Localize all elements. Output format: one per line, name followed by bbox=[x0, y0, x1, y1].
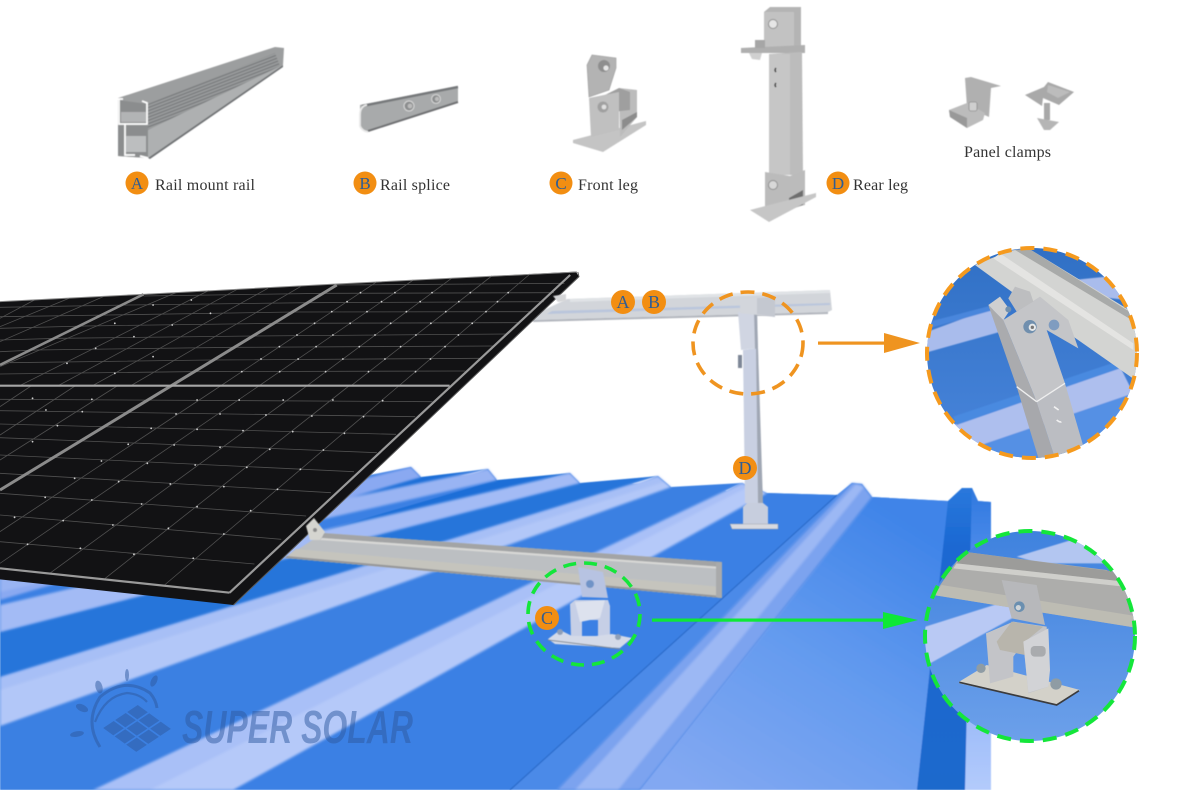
marker C: C bbox=[541, 608, 553, 628]
solar panel array bbox=[0, 272, 579, 605]
icon: sun rays bbox=[70, 669, 159, 738]
watermark logo: Super Solar bbox=[70, 669, 413, 753]
marker A: A bbox=[616, 292, 630, 312]
panel: component legend bbox=[118, 7, 1074, 222]
callout: A Rail mount rail: Rail mount rail bbox=[155, 177, 256, 194]
callout: B Rail splice: Rail splice bbox=[380, 177, 450, 194]
detail lens: front leg bbox=[920, 531, 1140, 741]
callout: B Rail splice bbox=[354, 172, 450, 194]
component: rear leg bbox=[741, 7, 816, 222]
detail lens: rear leg bbox=[920, 240, 1145, 465]
marker C bbox=[535, 606, 559, 630]
panel seams and frame bbox=[0, 272, 579, 605]
icon: sun arcs bbox=[92, 685, 157, 747]
callout: C Front leg bbox=[550, 172, 638, 194]
callout: D Rear leg bbox=[826, 172, 908, 194]
component: rail mount rail bbox=[118, 47, 284, 159]
roof bbox=[0, 467, 991, 790]
cell grid bbox=[0, 274, 564, 585]
highlight ring: front leg bbox=[528, 563, 640, 665]
rail clamp: upper bbox=[553, 294, 566, 302]
icon: solar grid bbox=[103, 705, 171, 752]
component: rail splice bbox=[360, 86, 458, 132]
arrow: green bbox=[652, 612, 918, 629]
callout: C Front leg: Front leg bbox=[578, 177, 638, 194]
marker B: B bbox=[648, 292, 660, 312]
marker D: D bbox=[738, 458, 752, 478]
marker A bbox=[611, 290, 635, 314]
callout: D Rear leg: D bbox=[832, 174, 844, 193]
rear leg foot bbox=[730, 503, 778, 529]
callout: D Rear leg: Rear leg bbox=[853, 177, 908, 194]
callout: B Rail splice: B bbox=[359, 174, 371, 193]
component: front leg bbox=[573, 55, 646, 152]
rear leg bbox=[730, 297, 778, 529]
callout: C Front leg: C bbox=[555, 174, 567, 193]
ribs bbox=[0, 467, 872, 790]
arrow: orange bbox=[818, 333, 920, 353]
component: panel clamps bbox=[949, 77, 1074, 130]
label: panel clamps: Panel clamps bbox=[964, 144, 1051, 161]
marker D bbox=[733, 456, 757, 480]
callout: A Rail mount rail bbox=[126, 172, 256, 194]
highlight ring: rear leg bbox=[693, 292, 803, 394]
callout: A Rail mount rail: A bbox=[131, 174, 144, 193]
wordmark: SUPER SOLAR bbox=[182, 701, 413, 753]
marker B bbox=[642, 290, 666, 314]
rail clamp: lower bbox=[306, 518, 325, 540]
cell junction dots bbox=[15, 293, 508, 558]
front leg bbox=[548, 567, 632, 649]
rear rail bbox=[533, 290, 832, 322]
front rail bbox=[285, 533, 722, 598]
